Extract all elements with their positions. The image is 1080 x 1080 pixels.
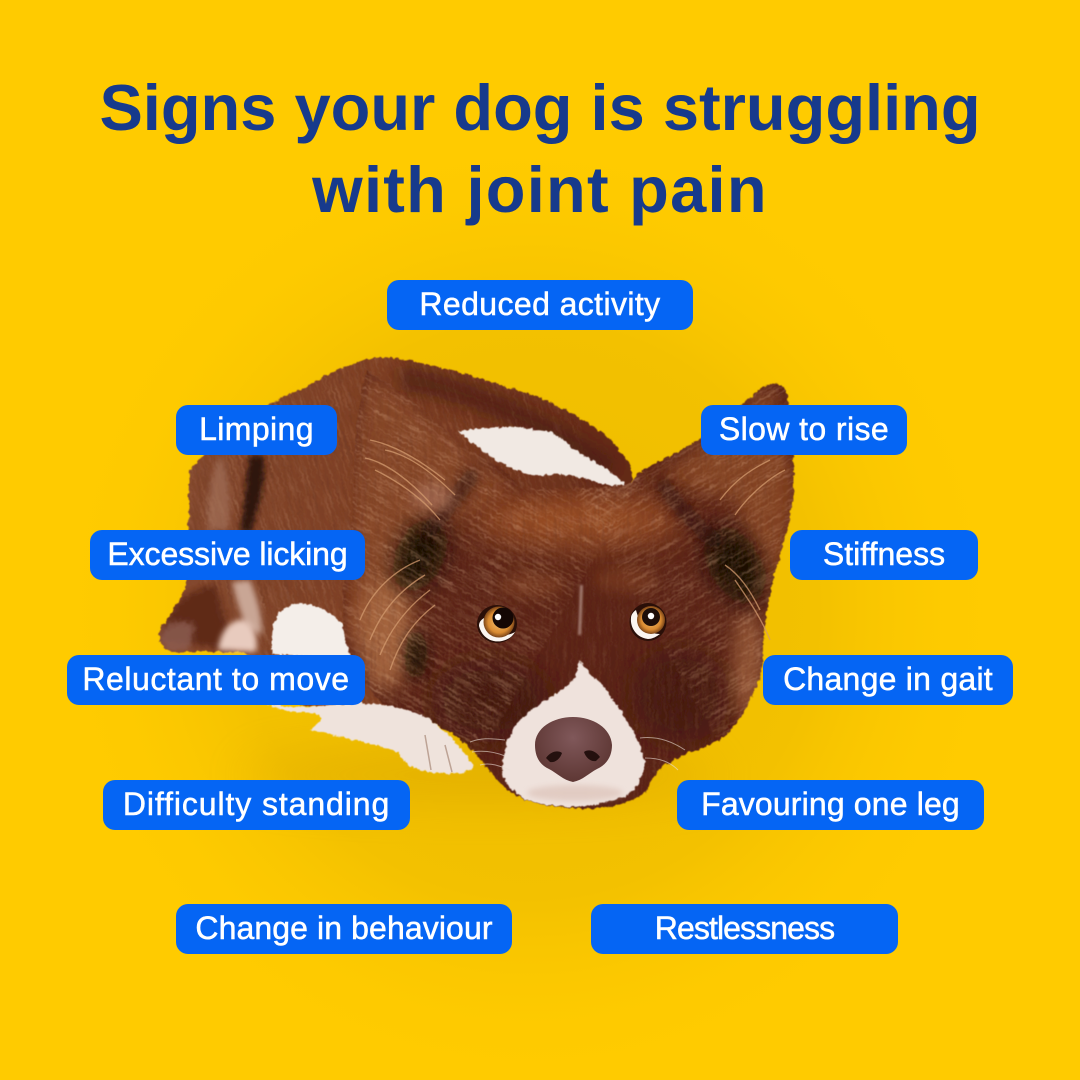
label: Stiffness: Stiffness: [823, 536, 945, 572]
label: Excessive licking: [90, 530, 365, 580]
dog body: [158, 356, 634, 710]
forehead stripe: [578, 585, 583, 635]
right ear colouring: [650, 385, 795, 620]
brows: [498, 572, 566, 598]
muzzle shading: [527, 785, 623, 801]
right eye: [630, 603, 666, 641]
fur texture: [342, 370, 644, 755]
hind paw: [218, 620, 257, 652]
paw toes: [425, 735, 452, 772]
label: Reduced activity: [387, 280, 693, 330]
title: with joint pain: [312, 153, 768, 226]
label: Change in behaviour: [176, 904, 512, 954]
label: Favouring one leg: [677, 780, 984, 830]
forehead highlight: [473, 494, 683, 546]
label: Reluctant to move: [67, 655, 365, 705]
label: Difficulty standing: Difficulty standing: [123, 786, 390, 822]
label: Excessive licking: Excessive licking: [107, 536, 348, 572]
label: Limping: Limping: [199, 411, 314, 447]
left ear colouring: [345, 370, 510, 640]
label: Restlessness: Restlessness: [655, 910, 834, 946]
label: Reduced activity: Reduced activity: [419, 286, 661, 322]
label: Slow to rise: [701, 405, 907, 455]
label: Reluctant to move: Reluctant to move: [82, 661, 350, 697]
dog photo illustration: [157, 322, 852, 932]
dog: [158, 356, 796, 810]
inner ear pale: [410, 483, 454, 511]
label: Change in gait: [763, 655, 1013, 705]
left eye: [477, 605, 517, 643]
label: Difficulty standing: [103, 780, 410, 830]
muzzle blaze: [502, 660, 645, 807]
white foreleg and front paw: [265, 703, 474, 774]
label: Slow to rise: Slow to rise: [719, 411, 889, 447]
white chest: [272, 603, 365, 660]
hind leg white stripe: [232, 580, 262, 635]
label: Change in behaviour: Change in behaviour: [195, 910, 493, 946]
fine fur strands: [360, 440, 785, 670]
head and ears: [341, 370, 796, 810]
nose: [535, 717, 612, 782]
label: Limping: [176, 405, 337, 455]
title: Signs your dog is struggling: [99, 71, 981, 144]
cheek fringes: [357, 580, 413, 690]
title: [99, 71, 981, 226]
floor shadow: [240, 753, 720, 797]
dark ear hollows: [382, 510, 458, 600]
label: Favouring one leg: Favouring one leg: [701, 786, 960, 822]
lower face shading: [430, 658, 550, 742]
white shoulder patch: [458, 427, 630, 490]
nostrils: [546, 750, 600, 762]
label: Stiffness: [790, 530, 978, 580]
label: Restlessness: [591, 904, 898, 954]
ear fold shadows: [425, 470, 475, 535]
whiskers: [470, 738, 685, 770]
label: Change in gait: Change in gait: [783, 661, 993, 697]
